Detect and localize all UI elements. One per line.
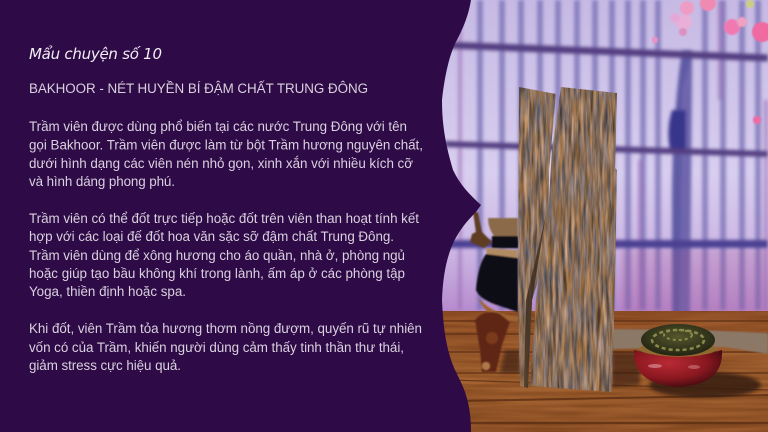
table shadow [500,350,761,398]
agarwood dark gap [524,215,546,388]
paragraph 3: vốn có của Trầm, khiến người dùng cảm thấy tinh thần thư thái, [29,340,404,355]
red bowl censer [634,324,722,387]
paragraph 3: Khi đốt, viên Trầm tỏa hương thơm nồng đượm, quyến rũ tự nhiên [29,321,422,336]
paragraph 1: và hình dáng phong phú. [29,174,175,189]
paragraph 1: Trầm viên được dùng phổ biến tại các nước Trung Đông với tên [29,119,407,134]
paragraph 2: Trầm viên dùng để xông hương cho áo quần, nhà ở, phòng ngủ [29,248,405,263]
agarwood left piece [518,87,556,388]
paragraph 1: gọi Bakhoor. Trầm viên được làm từ bột Trầm hương nguyên chất, [29,138,423,152]
wooden table [430,311,768,432]
heading: BAKHOOR - NÉT HUYỀN BÍ ĐẬM CHẤT TRUNG ĐÔNG [29,81,368,96]
paragraph 1 [29,119,423,189]
paragraph 2: hoặc giúp tạo bầu không khí trong lành, ấm áp ở các phòng tập [29,266,405,281]
paragraph 2: hợp với các loại đế đốt hoa văn sặc sỡ đậm chất Trung Đông. [29,229,394,244]
paragraph 1: dưới hình dạng các viên nén nhỏ gọn, xinh xắn với nhiều kích cỡ [29,156,413,171]
paragraph 2: Trầm viên có thể đốt trực tiếp hoặc đốt trên viên than hoạt tính kết [29,211,419,226]
paragraph 2: Yoga, thiền định hoặc spa. [29,284,186,299]
purple text panel with wavy edge [0,0,481,432]
photo background: latticed window [430,0,768,315]
paragraph 3 [29,321,422,373]
paragraph 3: giảm stress cực hiệu quả. [29,358,181,373]
incense censer [470,212,518,372]
paragraph 2 [29,211,419,299]
driftwood behind bowl [612,329,768,354]
agarwood right piece [530,87,617,392]
flowers [652,0,768,124]
title: Mẩu chuyện số 10 [29,45,162,63]
